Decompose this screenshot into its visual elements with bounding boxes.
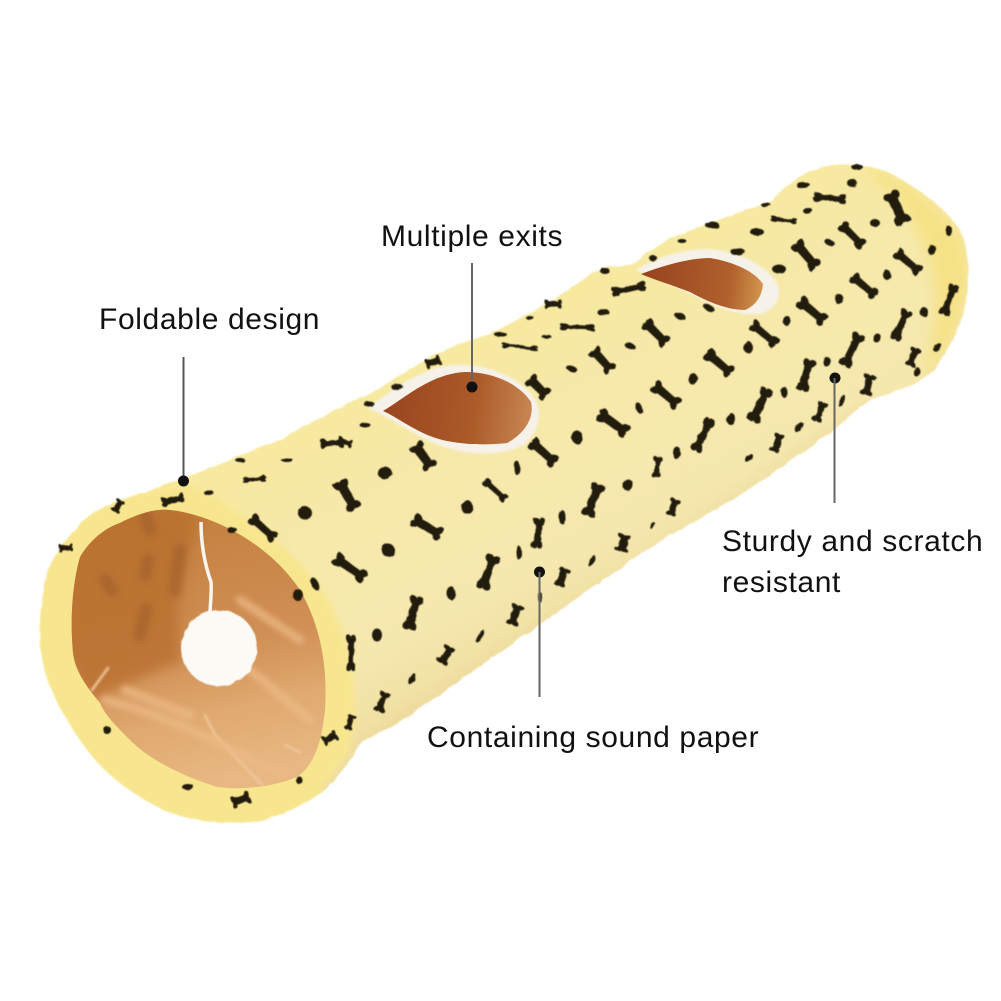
dot prints — [103, 164, 952, 790]
callout: sturdy and scratch resistant: Sturdy and scratch — [722, 525, 983, 558]
bone prints — [59, 189, 960, 809]
hole: second side exit with white trim — [636, 249, 779, 314]
callout: containing sound paper — [427, 566, 759, 754]
callout: sturdy and scratch resistant — [722, 372, 983, 599]
callout: multiple exits — [381, 220, 563, 392]
tunnel opening: orange nylon interior — [72, 510, 326, 788]
infographic: cat tunnel product with feature callouts — [38, 163, 981, 824]
callout: sturdy and scratch resistant: resistant — [722, 566, 841, 599]
bone and dot print on the fabric — [59, 164, 960, 809]
far end cap shading — [868, 168, 969, 377]
callout: foldable design: Foldable design — [99, 303, 320, 336]
callout: containing sound paper: Containing sound paper — [427, 721, 759, 754]
callout: foldable design — [99, 303, 320, 486]
interior dark upper wall — [72, 510, 199, 700]
lower edge shading — [363, 400, 880, 765]
hole: first side exit with white trim — [368, 365, 539, 453]
tunnel: yellow plush tube body — [30, 150, 980, 840]
interior fabric folds — [92, 515, 310, 785]
pompom toy on a string hanging in the opening — [181, 522, 257, 686]
callout: multiple exits: Multiple exits — [381, 220, 563, 253]
rim: saturated yellow lip of the tube end — [30, 482, 355, 830]
